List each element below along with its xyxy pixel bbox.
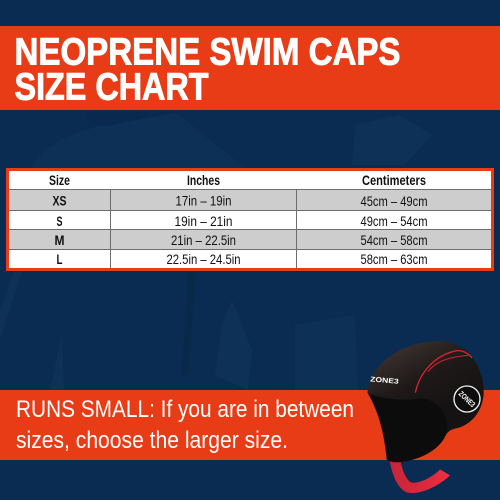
- size column: [52, 192, 66, 267]
- cap red stripes: [415, 351, 472, 393]
- background: faint swimmer in wetsuit: [0, 112, 432, 390]
- bottom callout banner: [0, 390, 500, 460]
- callout text: RUNS SMALL: If you are in between: [16, 396, 354, 423]
- inches column: 19in – 21in: [174, 214, 232, 229]
- title text: SIZE CHART: [14, 66, 208, 108]
- header row: [49, 173, 426, 188]
- centimeters column: 45cm – 49cm: [360, 194, 428, 209]
- cap side logo circle: ZONE3: [457, 389, 477, 409]
- header row: Inches: [187, 173, 220, 188]
- size column: S: [56, 213, 62, 229]
- title text: [14, 32, 400, 108]
- size column: M: [54, 232, 64, 248]
- centimeters column: 58cm – 63cm: [360, 252, 428, 267]
- title text: NEOPRENE SWIM CAPS: [14, 32, 400, 74]
- icon: neoprene swim cap: [367, 341, 485, 493]
- cap brand text: ZONE3: [370, 376, 399, 386]
- size column: L: [56, 251, 63, 267]
- cap strap: [389, 458, 450, 493]
- size column: XS: [52, 192, 66, 208]
- header row: Centimeters: [362, 173, 426, 188]
- size chart table: [6, 168, 494, 271]
- centimeters column: 54cm – 58cm: [360, 233, 428, 248]
- inches column: 21in – 22.5in: [171, 233, 236, 248]
- cap side logo circle: [449, 381, 485, 417]
- callout text: sizes, choose the larger size.: [16, 427, 288, 454]
- header row: Size: [49, 173, 70, 188]
- inches column: 17in – 19in: [176, 194, 232, 208]
- inches column: [166, 194, 240, 267]
- shaded rows: [9, 190, 491, 249]
- title banner: [0, 26, 500, 110]
- cap body: [367, 341, 484, 462]
- callout text: [16, 396, 354, 454]
- cap inner lining: [368, 393, 447, 462]
- centimeters column: [360, 194, 428, 267]
- inches column: 22.5in – 24.5in: [166, 252, 240, 267]
- centimeters column: 49cm – 54cm: [360, 214, 428, 229]
